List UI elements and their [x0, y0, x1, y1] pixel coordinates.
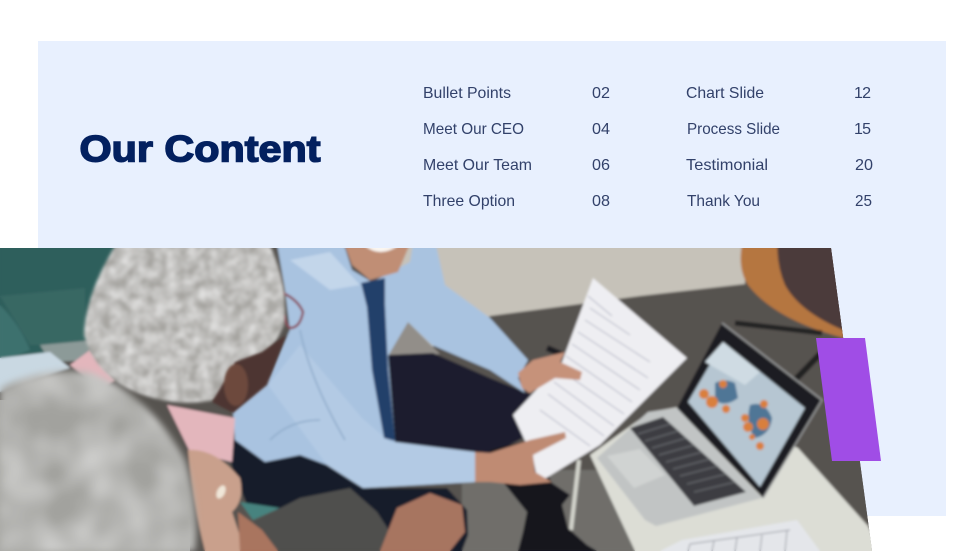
item: Bullet Points: Bullet Points [423, 85, 511, 102]
blue shirt [233, 232, 528, 488]
item: Three Option: Three Option [423, 193, 515, 210]
foreground blurred grey hair [0, 371, 196, 551]
contents list: right column [686, 85, 873, 210]
laptop [597, 323, 822, 526]
light rug [399, 248, 748, 348]
pink shirt [70, 350, 235, 462]
page: 08: 08 [592, 193, 610, 210]
page: 12: 12 [854, 85, 871, 102]
purple accent block [816, 338, 881, 461]
man's face [344, 248, 410, 282]
contents list: left column [423, 85, 610, 210]
carpet [0, 232, 880, 551]
grey carpet beside rug [388, 322, 440, 357]
elder's neck and ear [212, 335, 286, 413]
white table [590, 405, 880, 551]
page: 02: 02 [592, 85, 610, 102]
page: 20: 20 [855, 157, 873, 174]
elder's curly grey hair [84, 230, 285, 403]
page: 15: 15 [854, 121, 871, 138]
page: 25: 25 [855, 193, 872, 210]
light shoulder [0, 352, 70, 392]
panel: pale blue background [38, 41, 946, 516]
chair [734, 248, 844, 381]
glasses [283, 293, 303, 328]
item: Process Slide: Process Slide [687, 121, 780, 138]
sofa seat piece [240, 502, 280, 520]
sofa [0, 248, 115, 363]
item: Meet Our CEO: Meet Our CEO [423, 121, 524, 138]
lighter carpet at lower middle [462, 470, 640, 551]
page: 06: 06 [592, 157, 610, 174]
item: Thank You: Thank You [687, 193, 760, 210]
document held by the man [513, 278, 687, 483]
lower hand [475, 432, 566, 485]
clasped fist [380, 493, 465, 551]
man's trousers [225, 353, 535, 551]
tie [361, 278, 395, 441]
elder's hand [188, 450, 278, 551]
gray trousers [278, 486, 388, 547]
photo: advisor reviewing a document with an older couple [0, 230, 880, 551]
man's lower leg and shoe [490, 440, 597, 551]
foreground hair base [0, 400, 190, 551]
hand holding pen [518, 348, 582, 393]
papers on table [660, 520, 820, 551]
item: Testimonial: Testimonial [686, 157, 768, 174]
item: Meet Our Team: Meet Our Team [423, 157, 532, 174]
item: Chart Slide: Chart Slide [686, 85, 764, 102]
page: 04: 04 [592, 121, 610, 138]
title: Our Content [80, 128, 320, 170]
